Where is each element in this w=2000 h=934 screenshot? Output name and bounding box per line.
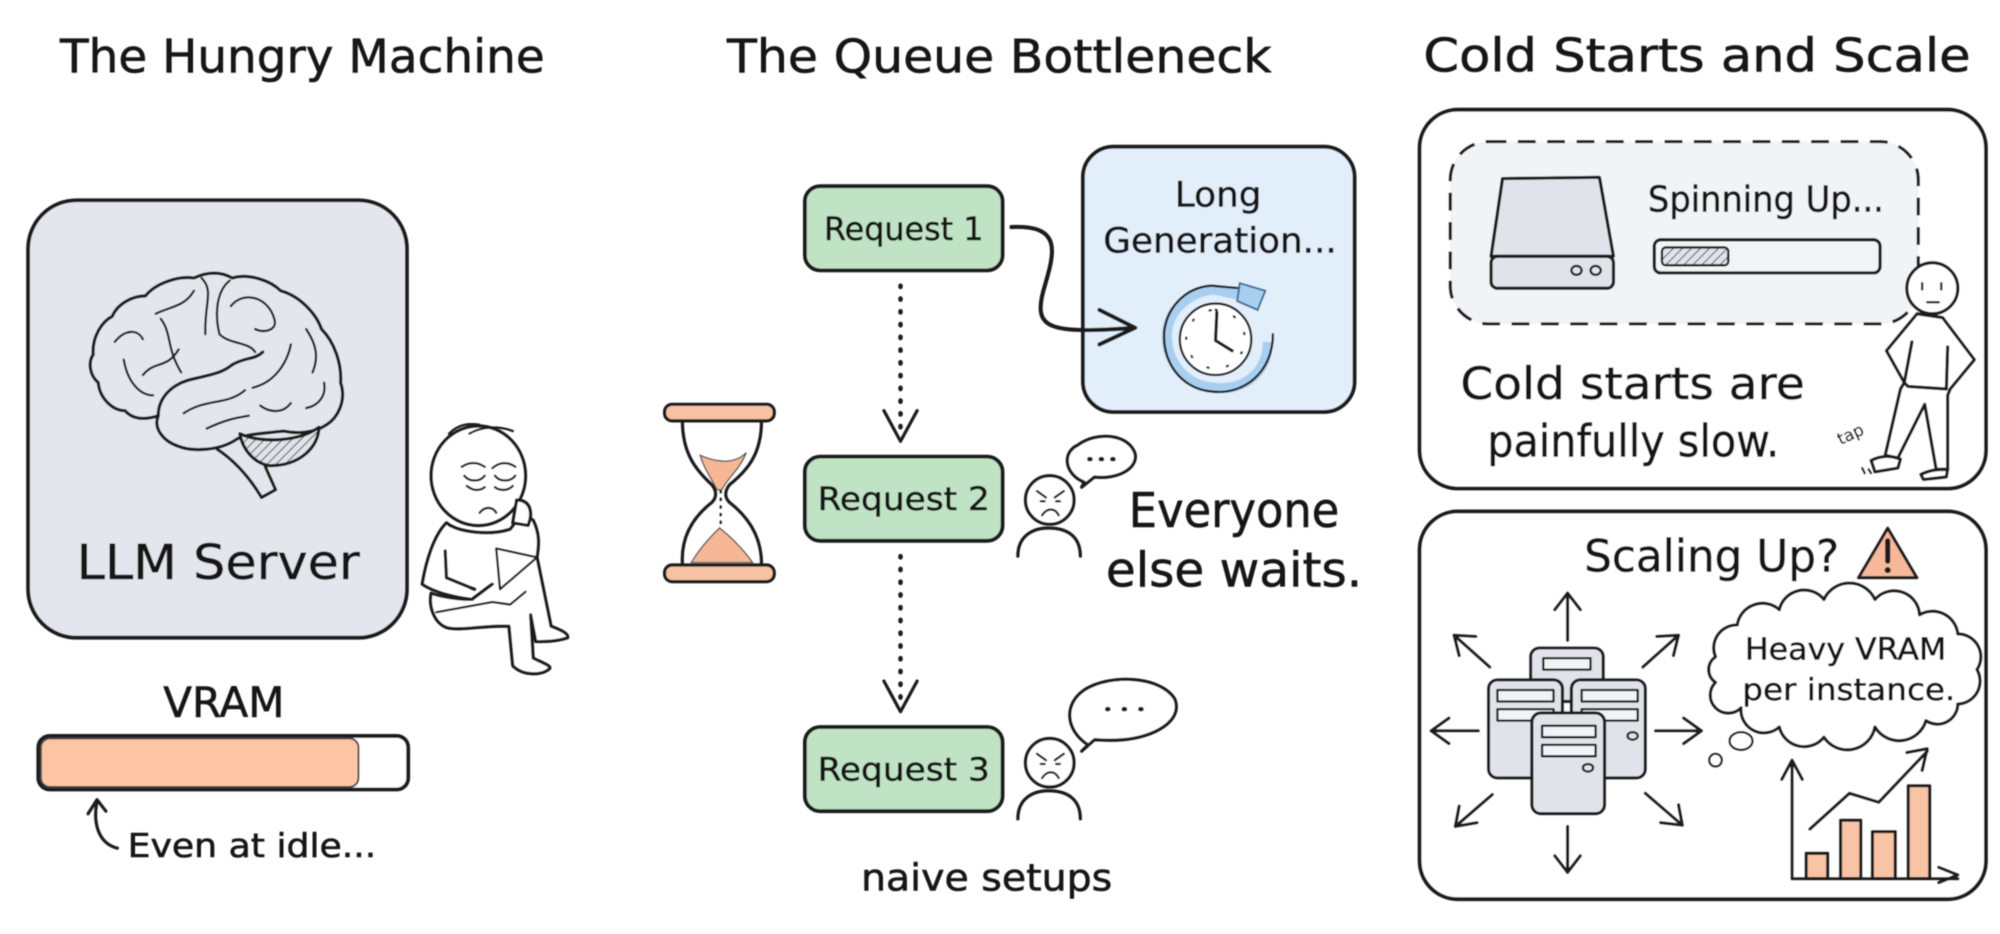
- label: Even at idle: Even at idle...: [128, 826, 376, 865]
- text: cold starts are painfully slow: painfully slow.: [1487, 416, 1779, 468]
- node: Request 1: Request 1: [824, 210, 983, 248]
- bar: VRAM usage: [38, 736, 408, 789]
- dashed box: spinning up: [1450, 142, 1918, 324]
- node: Request 2: [805, 457, 1003, 541]
- text: Everyone else waits: [1106, 483, 1362, 599]
- dashed box: spinning up: Spinning Up...: [1648, 180, 1884, 221]
- callout: thought cloud: [1709, 583, 1981, 767]
- callout: thought cloud: per instance.: [1742, 673, 1955, 708]
- text: cold starts are painfully slow: Cold starts are: [1460, 358, 1805, 410]
- text: cold starts are painfully slow: [1460, 358, 1805, 468]
- title: Cold Starts and Scale: Cold Starts and Scale: [1423, 28, 1971, 82]
- label: VRAM: VRAM: [163, 678, 284, 727]
- arrow: dotted 1 to 2: [884, 286, 917, 441]
- node: Request 3: Request 3: [818, 751, 990, 789]
- icon: angry person 3 with speech bubble: [1018, 679, 1176, 819]
- chart: rising bars with trend arrow: [1782, 749, 1958, 883]
- node: Request 1: [805, 186, 1003, 270]
- panel: long generation: Long: [1175, 176, 1261, 216]
- icon: standing tapping person: tap: [1834, 420, 1867, 449]
- node: Request 2: Request 2: [818, 480, 990, 518]
- icon: clock with refresh arrow: [1164, 283, 1273, 392]
- arrow: dotted 2 to 3: [884, 556, 917, 712]
- panel: long generation: Generation...: [1103, 222, 1337, 262]
- caption: naive setups: naive setups: [861, 856, 1112, 899]
- icon: server cluster: [1488, 648, 1645, 814]
- node: Request 3: [805, 727, 1003, 811]
- title: The Queue Bottleneck: The Queue Bottleneck: [726, 30, 1272, 84]
- icon: angry person 2 with speech bubble: [1018, 436, 1135, 556]
- icon: hourglass: [665, 404, 774, 582]
- label: LLM Server: LLM Server: [77, 535, 360, 591]
- progress bar: [1654, 240, 1880, 273]
- panel: long generation: [1083, 147, 1355, 412]
- icon: hard drive: [1491, 177, 1613, 288]
- icon: brain: [90, 273, 343, 497]
- panel: scaling up: [1420, 511, 1986, 899]
- arrows: scaling out in eight directions: [1431, 593, 1701, 872]
- text: Everyone else waits: Everyone: [1129, 483, 1339, 539]
- icon: warning triangle: [1858, 528, 1917, 578]
- callout: thought cloud: Heavy VRAM: [1745, 632, 1946, 667]
- arrow: to VRAM bar: [88, 800, 117, 848]
- title: The Hungry Machine: The Hungry Machine: [59, 30, 545, 84]
- panel: LLM server: [28, 200, 407, 638]
- panel: scaling up: Scaling Up?: [1584, 530, 1839, 582]
- panel: cold starts: [1420, 110, 1986, 488]
- icon: standing tapping person: [1834, 263, 1974, 480]
- text: Everyone else waits: else waits.: [1106, 543, 1362, 599]
- icon: tired person sitting: [422, 424, 568, 674]
- arrow: Request 1 to long generation: [1011, 227, 1135, 344]
